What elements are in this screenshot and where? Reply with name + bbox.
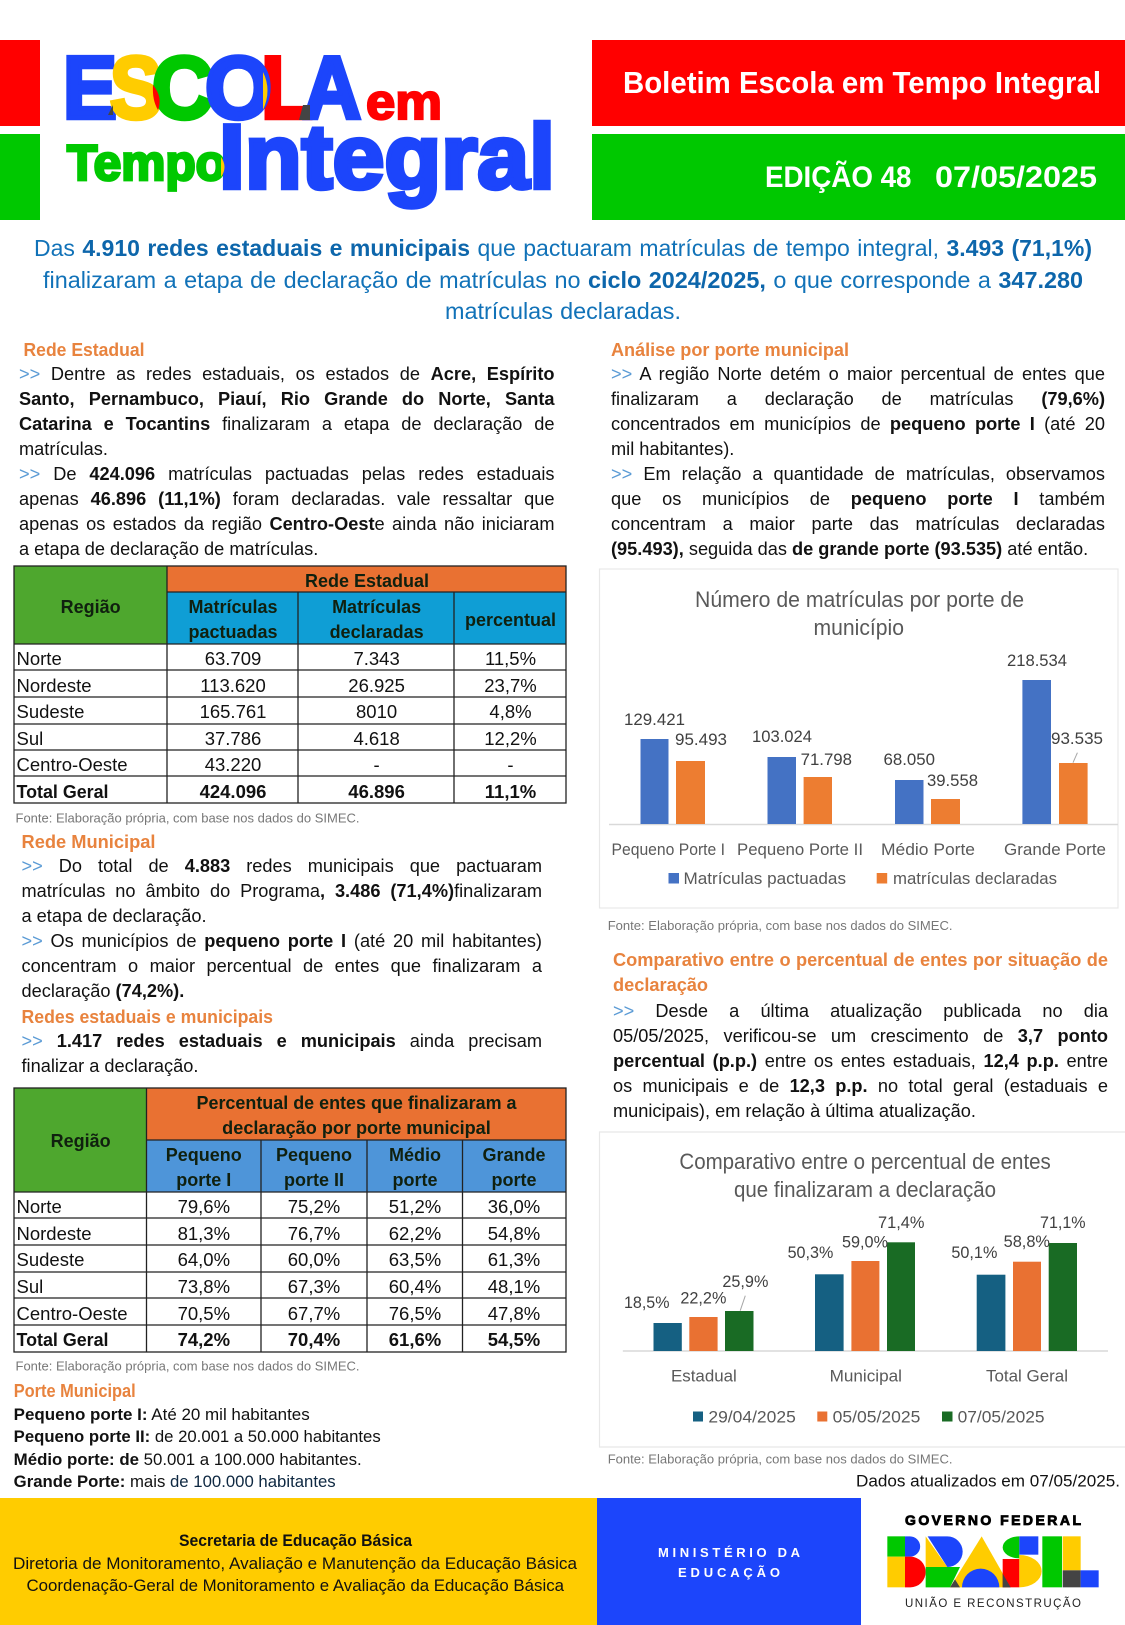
bars: 07/05/2025 — [725, 1242, 1077, 1351]
text: rede municipal: >> Do total de 4.883 redes municipais que pactuaram — [22, 856, 542, 876]
footer: secretaria: Secretaria de Educação Básica — [179, 1531, 412, 1550]
text: análise por porte municipal: >> A região Norte detém o maior percentual de entes que — [611, 364, 1105, 384]
table: percentual por porte municipal: 75,2% — [288, 1196, 340, 1217]
lead paragraph: matrículas declaradas. — [445, 298, 681, 324]
data labels: 22,2% — [680, 1290, 727, 1308]
heading: Rede Municipal: Rede Municipal — [22, 832, 156, 852]
text: porte definitions: Grande Porte: mais de 100.000 habitantes — [14, 1473, 336, 1491]
legend: 05/05/2025 — [833, 1408, 920, 1426]
text: comparativo — [613, 1000, 1108, 1121]
bars: matrículas pactuadas — [640, 680, 1051, 824]
table: Rede Estadual: 11,1% — [485, 781, 536, 802]
table: percentual por porte municipal: Norte — [16, 1196, 62, 1217]
data labels — [624, 652, 1103, 790]
data labels: 93.535 — [1051, 730, 1103, 748]
text: comparativo: >> Desde a última atualização publicada no dia — [613, 1000, 1108, 1020]
text: porte definitions: Pequeno porte I: Até 20 mil habitantes — [14, 1406, 310, 1424]
logo: Escola em Tempo Integral: O — [205, 38, 272, 137]
text: análise por porte municipal — [611, 364, 1105, 559]
text: rede estadual: Santo, Pernambuco, Piauí, Rio Grande do Norte, Santa — [19, 389, 554, 409]
left red band — [0, 40, 40, 126]
footer: ministério: MINISTÉRIO DA — [658, 1545, 801, 1560]
table: Rede Estadual: 4,8% — [489, 701, 532, 722]
table: percentual por porte municipal: Centro-Oeste — [16, 1303, 128, 1324]
data labels: 218.534 — [1007, 652, 1067, 670]
category labels: Pequeno Porte II — [737, 841, 863, 859]
table: percentual por porte municipal: 54,5% — [488, 1329, 540, 1350]
table: percentual por porte municipal: 67,7% — [288, 1303, 340, 1324]
category labels: Municipal — [830, 1368, 902, 1386]
logo: Governo Federal: UNIÃO E RECONSTRUÇÃO — [905, 1597, 1081, 1610]
table: percentual por porte municipal: 61,3% — [488, 1249, 540, 1270]
category labels: Estadual — [671, 1368, 737, 1386]
table: percentual por porte municipal: 60,0% — [288, 1249, 340, 1270]
source note: Fonte: Elaboração própria, com base nos dados do SIMEC. — [608, 918, 952, 933]
text: porte definitions — [14, 1406, 381, 1491]
table: percentual por porte municipal: Médio — [389, 1145, 441, 1165]
table: percentual por porte municipal: 47,8% — [488, 1303, 540, 1324]
chart: número de matrículas por porte de município: Número de matrículas por porte de — [695, 587, 1024, 612]
text: rede estadual: apenas os estados da região Centro-Oeste ainda não iniciaram — [19, 514, 554, 534]
logo: Escola em Tempo Integral: Tempo — [67, 135, 226, 191]
table: percentual por porte municipal: declaração por porte municipal — [222, 1118, 491, 1138]
category labels: Médio Porte — [881, 841, 975, 859]
text: rede estadual: apenas 46.896 (11,1%) foram declaradas. vale ressaltar que — [19, 489, 554, 509]
text: porte definitions: Médio porte: de 50.001 a 100.000 habitantes. — [14, 1451, 362, 1469]
table: Rede Estadual: Centro-Oeste — [16, 754, 128, 775]
table: percentual por porte municipal — [14, 1088, 566, 1352]
logo: Escola em Tempo Integral: em — [366, 74, 442, 130]
heading: comparativo entre o percentual de entes — [613, 950, 1108, 995]
data labels: 95.493 — [675, 731, 727, 749]
table: Rede Estadual: 8010 — [356, 701, 397, 722]
table: Rede Estadual: 113.620 — [200, 675, 266, 696]
heading: comparativo entre o percentual de entes: declaração — [613, 975, 708, 995]
left green band — [0, 134, 40, 220]
table: percentual por porte municipal: Pequeno — [276, 1145, 352, 1165]
table: Rede Estadual: Nordeste — [16, 675, 92, 696]
text: análise por porte municipal: concentrados em municípios de pequeno porte I (até 20 — [611, 414, 1105, 434]
icon: Brasil wordmark — [887, 1536, 1099, 1587]
footer: secretaria: Coordenação-Geral de Monitoramento e Avaliação da Educação Básica — [26, 1576, 565, 1595]
category labels: Grande Porte — [1004, 841, 1106, 859]
text: comparativo: os municipais e de 12,3 p.p. no total geral (estaduais e — [613, 1076, 1108, 1096]
table: percentual por porte municipal: 60,4% — [389, 1276, 441, 1297]
logo: Governo Federal: GOVERNO FEDERAL — [905, 1512, 1081, 1528]
table: Rede Estadual: 23,7% — [484, 675, 537, 696]
table: Rede Estadual: 63.709 — [205, 648, 261, 669]
banner: edition and date: 07/05/2025 — [935, 161, 1097, 194]
table: Rede Estadual: Sudeste — [16, 701, 84, 722]
footer: ministério — [597, 1498, 861, 1625]
table: percentual por porte municipal: porte I — [176, 1170, 231, 1190]
logo: Escola em Tempo Integral: S — [110, 38, 162, 137]
table: Rede Estadual: 165.761 — [200, 701, 266, 722]
text: análise por porte municipal: que os municípios de pequeno porte I também — [611, 489, 1105, 509]
legend: 29/04/2025 — [708, 1408, 796, 1426]
table: percentual por porte municipal: Total Geral — [16, 1329, 108, 1350]
table: percentual por porte municipal: 51,2% — [389, 1196, 441, 1217]
table: percentual por porte municipal: Sudeste — [16, 1249, 84, 1270]
text: rede municipal: concentram o maior percentual de entes que finalizaram a — [22, 956, 542, 976]
footer: secretaria — [0, 1498, 597, 1625]
logo: Escola em Tempo Integral: Integral — [219, 107, 555, 208]
heading: Porte Municipal: Porte Municipal — [14, 1381, 136, 1401]
logo: Escola em Tempo Integral: L — [261, 38, 313, 137]
chart: comparativo entre o percentual de entes: Comparativo entre o percentual de entes — [679, 1149, 1051, 1174]
table: Rede Estadual: Total Geral — [16, 781, 108, 802]
table: percentual por porte municipal: 61,6% — [389, 1329, 441, 1350]
table: Rede Estadual: pactuadas — [188, 622, 278, 642]
text: rede estadual — [19, 364, 555, 559]
banner: bulletin title — [592, 40, 1125, 126]
table: percentual por porte municipal: 73,8% — [178, 1276, 230, 1297]
table: Rede Estadual: Rede Estadual — [305, 571, 429, 591]
data labels — [624, 1214, 1086, 1312]
table: percentual por porte municipal: 54,8% — [488, 1223, 540, 1244]
banner: edition and date — [592, 134, 1125, 220]
table: Rede Estadual: - — [507, 754, 514, 775]
text: comparativo: municipais), em relação à última atualização. — [613, 1100, 976, 1120]
table: Rede Estadual: declaradas — [330, 622, 424, 642]
text: rede municipal: >> Os municípios de pequeno porte I (até 20 mil habitantes) — [22, 931, 542, 951]
table: Rede Estadual: 7.343 — [353, 648, 400, 669]
table: percentual por porte municipal: 67,3% — [288, 1276, 340, 1297]
text: rede municipal: declaração (74,2%). — [22, 981, 184, 1001]
table: Rede Estadual — [14, 566, 566, 803]
text: análise por porte municipal: >> Em relação a quantidade de matrículas, observamos — [611, 464, 1105, 484]
text: rede estadual: Catarina e Tocantins finalizaram a etapa de declaração de — [19, 414, 554, 434]
table: percentual por porte municipal: 74,2% — [178, 1329, 230, 1350]
footer: secretaria: Diretoria de Monitoramento, Avaliação e Manutenção da Educação Básica — [13, 1554, 578, 1573]
data labels: 39.558 — [927, 772, 978, 790]
table: Rede Estadual: Norte — [16, 648, 62, 669]
text: rede estadual: a etapa de declaração de matrículas. — [19, 539, 318, 559]
table: percentual por porte municipal: 70,4% — [288, 1329, 340, 1350]
table: Rede Estadual: 37.786 — [205, 728, 261, 749]
table: Rede Estadual: 424.096 — [200, 781, 266, 802]
bars: matrículas declaradas — [676, 761, 1088, 824]
legend: Matrículas pactuadas — [684, 870, 846, 888]
table: Rede Estadual: 11,5% — [485, 648, 536, 669]
heading: Redes estaduais e municipais: Redes estaduais e municipais — [22, 1007, 273, 1027]
lead paragraph: finalizaram a etapa de declaração de matrículas no ciclo 2024/2025, o que corresponde a 347.280 — [43, 266, 1083, 292]
data labels: 103.024 — [752, 728, 812, 746]
table: Rede Estadual: 12,2% — [484, 728, 537, 749]
table: percentual por porte municipal: 48,1% — [488, 1276, 540, 1297]
legend — [668, 870, 1057, 888]
data labels: 50,3% — [788, 1244, 834, 1262]
table: percentual por porte municipal: 64,0% — [178, 1249, 230, 1270]
table: percentual por porte municipal: 79,6% — [178, 1196, 230, 1217]
text: análise por porte municipal: finalizaram a declaração de matrículas (79,6%) — [611, 389, 1105, 409]
table: percentual por porte municipal: Grande — [482, 1145, 546, 1165]
data labels: 58,8% — [1004, 1233, 1050, 1251]
table: Rede Estadual: Sul — [16, 728, 43, 749]
text: rede estadual: >> De 424.096 matrículas pactuadas pelas redes estaduais — [19, 464, 554, 484]
bars: 29/04/2025 — [654, 1274, 1005, 1351]
table: percentual por porte municipal: 36,0% — [488, 1196, 540, 1217]
data labels: 71,1% — [1040, 1214, 1086, 1232]
chart: número de matrículas por porte de município — [600, 569, 1118, 908]
data labels: 71.798 — [801, 751, 852, 769]
data labels: 18,5% — [624, 1294, 670, 1312]
category labels: Total Geral — [986, 1368, 1068, 1386]
table: percentual por porte municipal: porte — [492, 1170, 536, 1190]
text: redes estaduais e municipais — [22, 1031, 542, 1076]
text: rede estadual: matrículas. — [19, 439, 108, 459]
data labels: 25,9% — [722, 1273, 769, 1291]
legend: matrículas declaradas — [893, 870, 1057, 888]
text: rede municipal — [22, 856, 542, 1001]
source note: Fonte: Elaboração própria, com base nos dados do SIMEC. — [608, 1452, 952, 1466]
table: percentual por porte municipal: Sul — [16, 1276, 43, 1297]
category labels — [671, 1368, 1068, 1386]
data labels: 50,1% — [951, 1244, 998, 1262]
table: Rede Estadual: Matrículas — [332, 597, 421, 617]
text: rede municipal: matrículas no âmbito do Programa, 3.486 (71,4%)finalizaram — [22, 881, 542, 901]
update date: Dados atualizados em 07/05/2025. — [856, 1472, 1120, 1490]
chart: comparativo entre o percentual de entes: que finalizaram a declaração — [734, 1177, 996, 1202]
table: percentual por porte municipal: 63,5% — [389, 1249, 441, 1270]
text: rede municipal: a etapa de declaração. — [22, 906, 207, 926]
text: rede estadual: >> Dentre as redes estaduais, os estados de Acre, Espírito — [19, 364, 554, 384]
chart: número de matrículas por porte de município: município — [814, 615, 904, 640]
table: percentual por porte municipal: 81,3% — [178, 1223, 230, 1244]
bars: 05/05/2025 — [689, 1261, 1041, 1351]
heading: Análise por porte municipal: Análise por porte municipal — [611, 340, 849, 360]
logo: Escola em Tempo Integral — [63, 38, 555, 208]
banner: edition and date: EDIÇÃO 48 — [765, 160, 912, 194]
text: comparativo: 05/05/2025, verificou-se um crescimento de 3,7 ponto — [613, 1026, 1108, 1046]
text: comparativo: percentual (p.p.) entre os entes estaduais, 12,4 p.p. entre — [613, 1050, 1108, 1070]
table: percentual por porte municipal: 70,5% — [178, 1303, 230, 1324]
table: Rede Estadual: 26.925 — [348, 675, 405, 696]
text: porte definitions: Pequeno porte II: de 20.001 a 50.000 habitantes — [14, 1428, 381, 1446]
logo: Escola em Tempo Integral: A — [303, 38, 361, 137]
table: percentual por porte municipal: porte II — [284, 1170, 344, 1190]
text: análise por porte municipal: (95.493), seguida das de grande porte (93.535) até então. — [611, 539, 1088, 559]
text: redes estaduais e municipais: >> 1.417 redes estaduais e municipais ainda precisam — [22, 1031, 542, 1051]
table: Rede Estadual: 43.220 — [205, 754, 261, 775]
logo: Escola em Tempo Integral: C — [152, 38, 213, 137]
table: percentual por porte municipal: 76,7% — [288, 1223, 340, 1244]
heading: Rede Estadual: Rede Estadual — [24, 340, 144, 360]
data labels: 71,4% — [878, 1214, 925, 1232]
table: percentual por porte municipal: Nordeste — [16, 1223, 92, 1244]
category labels — [612, 841, 1106, 859]
text: análise por porte municipal: mil habitantes). — [611, 439, 734, 459]
table: Rede Estadual: Região — [61, 597, 121, 617]
text: redes estaduais e municipais: finalizar a declaração. — [22, 1056, 198, 1076]
lead paragraph: Das 4.910 redes estaduais e municipais que pactuaram matrículas de tempo integral, 3.493 (71,1%) — [34, 235, 1092, 261]
table: percentual por porte municipal: porte — [392, 1170, 438, 1190]
table: Rede Estadual: - — [374, 754, 380, 775]
data labels: 68.050 — [884, 751, 935, 769]
footer: ministério: EDUCAÇÃO — [678, 1565, 780, 1580]
table: percentual por porte municipal: 62,2% — [389, 1223, 441, 1244]
logo: Governo Federal — [887, 1512, 1099, 1610]
text: análise por porte municipal: concentram a maior parte das matrículas declaradas — [611, 514, 1105, 534]
source note: Fonte: Elaboração própria, com base nos dados do SIMEC. — [16, 1358, 360, 1374]
table: Rede Estadual: 4.618 — [353, 728, 400, 749]
lead paragraph — [34, 235, 1092, 324]
category labels: Pequeno Porte I — [612, 841, 725, 859]
data labels: 59,0% — [842, 1234, 888, 1252]
chart: comparativo entre o percentual de entes — [600, 1132, 1125, 1447]
table: percentual por porte municipal: Região — [51, 1131, 111, 1151]
table: percentual por porte municipal: Pequeno — [166, 1145, 242, 1165]
legend — [693, 1408, 1045, 1426]
banner: bulletin title: Boletim Escola em Tempo Integral — [623, 65, 1101, 100]
table: percentual por porte municipal: 76,5% — [389, 1303, 441, 1324]
legend: 07/05/2025 — [958, 1408, 1045, 1426]
logo: Escola em Tempo Integral: E — [63, 38, 117, 137]
table: percentual por porte municipal: Percentual de entes que finalizaram a — [196, 1093, 517, 1113]
table: Rede Estadual: 46.896 — [348, 781, 405, 802]
table: Rede Estadual: Matrículas — [188, 597, 278, 617]
heading: comparativo entre o percentual de entes: Comparativo entre o percentual de entes por situação de — [613, 950, 1108, 970]
data labels: 129.421 — [624, 711, 685, 729]
table: Rede Estadual: percentual — [465, 610, 556, 630]
source note: Fonte: Elaboração própria, com base nos dados do SIMEC. — [16, 810, 360, 826]
